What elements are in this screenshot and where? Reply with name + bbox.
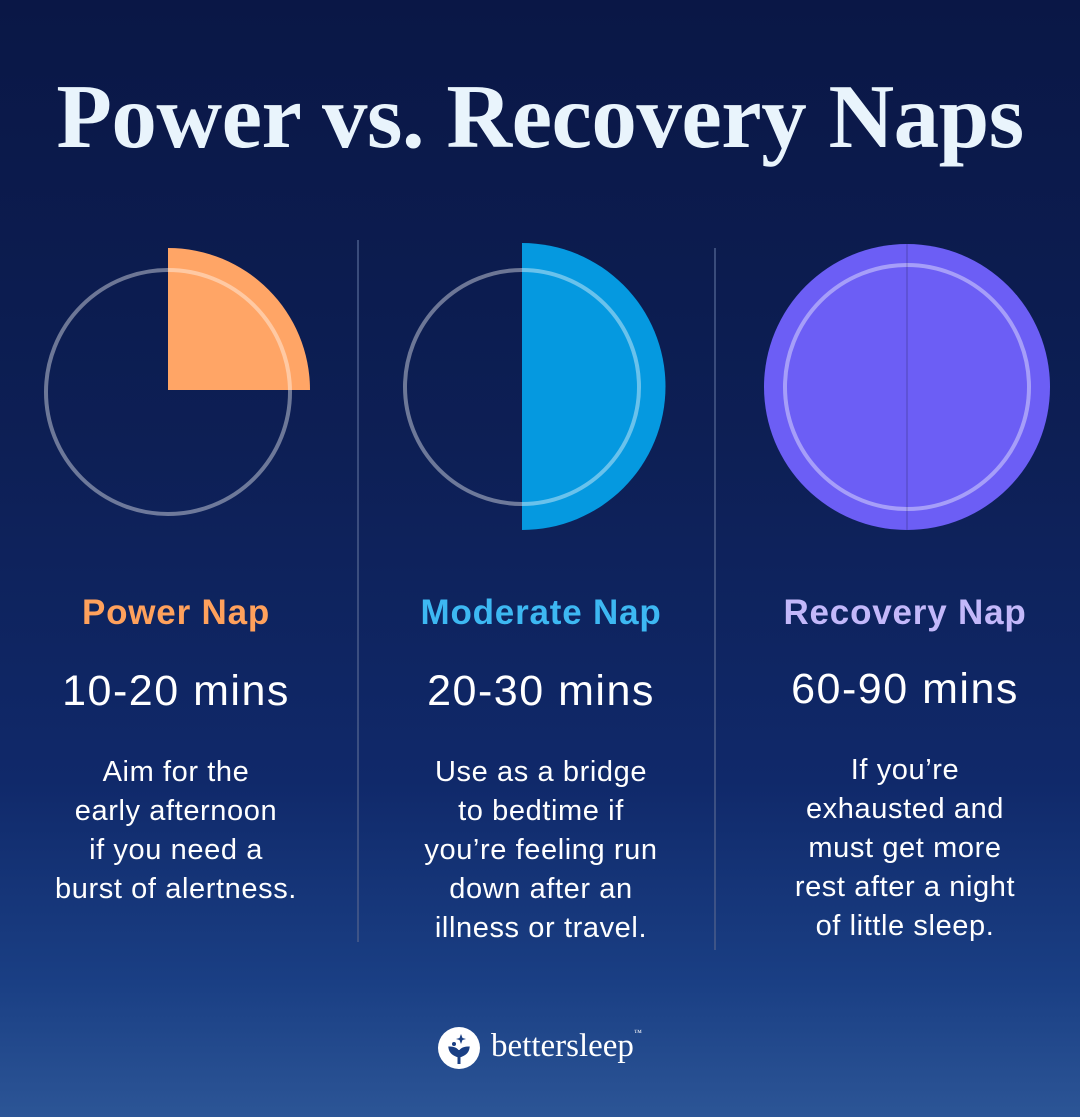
description: Use as a bridge [435, 756, 647, 788]
title: Power vs. Recovery Naps [56, 66, 1024, 167]
description: must get more [808, 832, 1002, 864]
time: 10-20 mins [62, 667, 290, 715]
logo [438, 1027, 642, 1069]
description: burst of alertness. [55, 873, 297, 905]
description: Aim for the [103, 756, 249, 788]
time: 20-30 mins [427, 667, 655, 715]
heading: Recovery Nap [783, 593, 1027, 632]
panel: recovery nap [783, 593, 1027, 942]
panel: power nap [55, 593, 297, 905]
description: exhausted and [806, 793, 1004, 825]
description: early afternoon [75, 795, 277, 827]
chart: recovery nap [764, 244, 1050, 530]
heading: Moderate Nap [420, 593, 662, 632]
chart: power nap [46, 248, 310, 514]
time: 60-90 mins [791, 665, 1019, 713]
description: to bedtime if [458, 795, 624, 827]
description [55, 756, 297, 905]
icon: logo leaf [438, 1027, 480, 1069]
chart: moderate nap [405, 243, 666, 530]
description [424, 756, 658, 944]
description: illness or travel. [435, 912, 647, 944]
description [795, 754, 1015, 942]
description: of little sleep. [816, 910, 994, 942]
description: if you need a [89, 834, 263, 866]
description: down after an [449, 873, 633, 905]
description: If you’re [851, 754, 959, 786]
heading: Power Nap [82, 593, 270, 632]
description: you’re feeling run [424, 834, 658, 866]
brand name: bettersleep™ [491, 1028, 642, 1064]
description: rest after a night [795, 871, 1015, 903]
panel: moderate nap [420, 593, 662, 944]
